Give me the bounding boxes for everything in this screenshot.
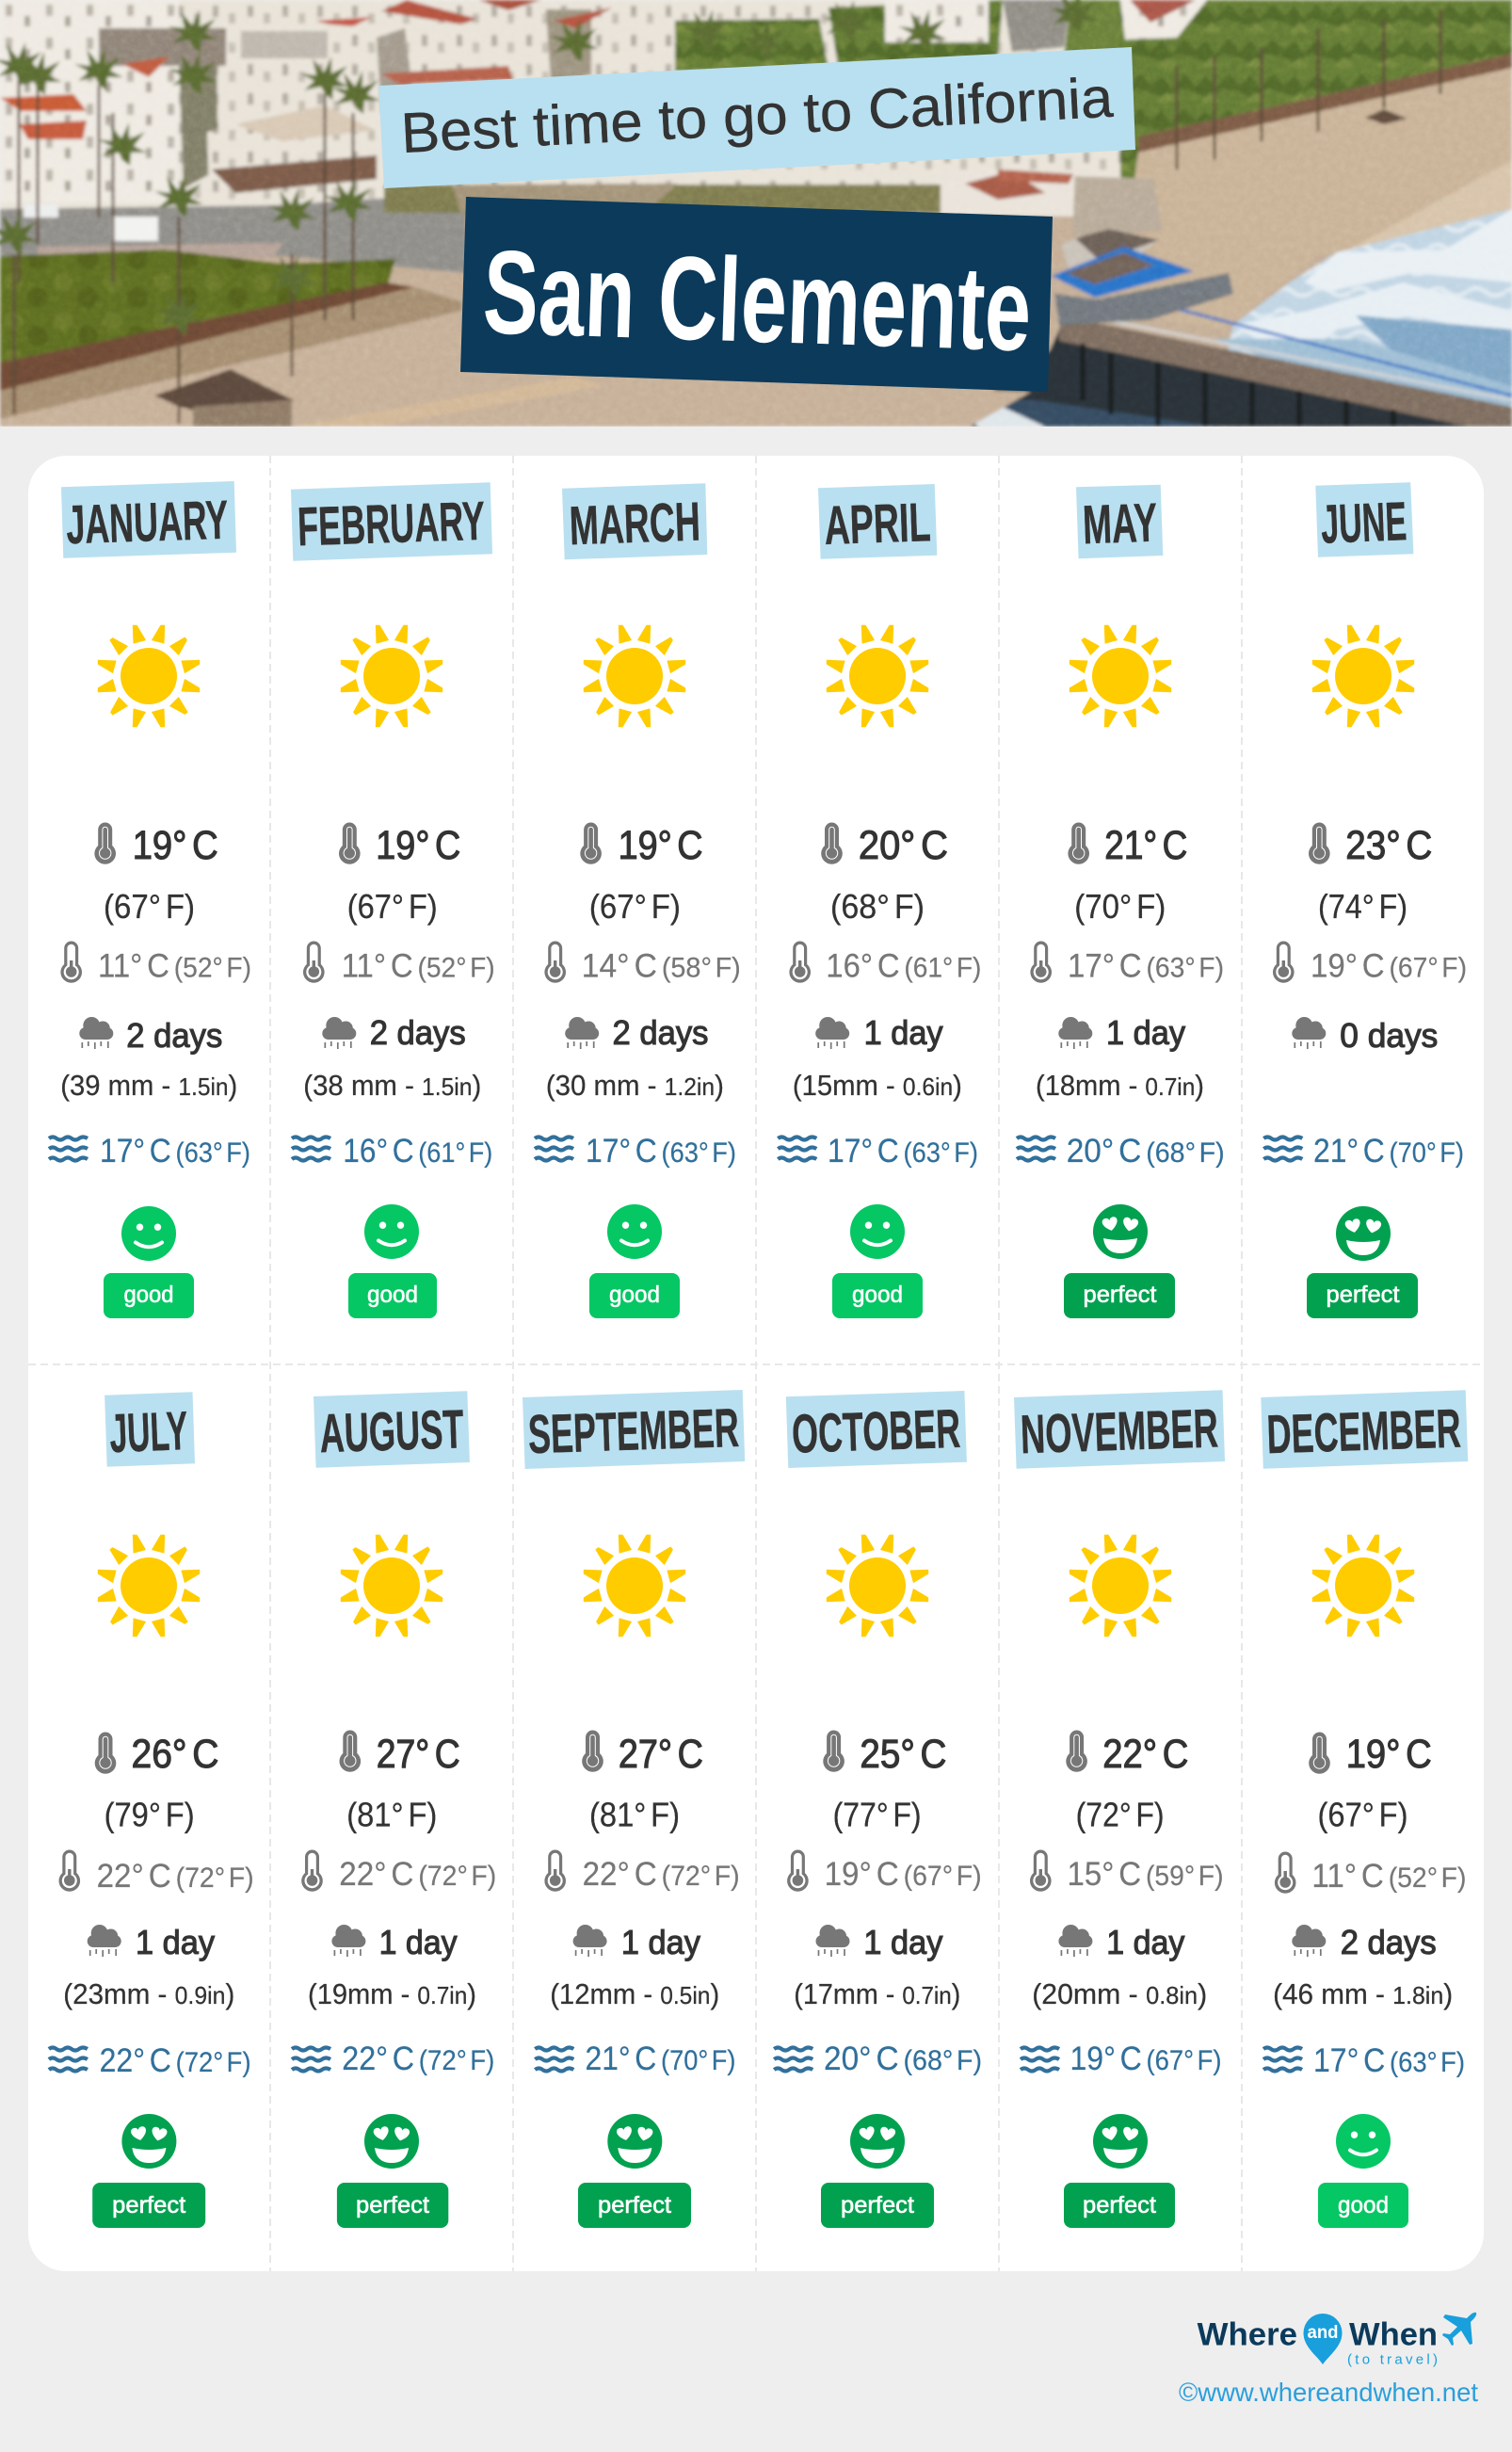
- sea temperature: 21° C (70° F): [586, 2041, 736, 2077]
- icon: smiley: [121, 1206, 176, 1261]
- month: June: [1263, 482, 1467, 1318]
- icon: low temperature thermometer: [58, 1849, 80, 1892]
- high temperature: 21° C: [1104, 823, 1187, 868]
- high temperature fahrenheit: (70° F): [1074, 887, 1166, 926]
- sea temperature: 17° C (63° F): [586, 1133, 736, 1170]
- rainy days: 2 days: [1341, 1923, 1437, 1961]
- between the banners: [384, 185, 949, 213]
- rating badge: good: [1318, 2183, 1408, 2228]
- logo: Where and When: When: [1349, 2317, 1438, 2353]
- high temperature fahrenheit: (81° F): [346, 1795, 437, 1834]
- month label: July: JULY: [108, 1400, 189, 1464]
- month: March: [535, 483, 741, 1318]
- icon: sea waves: [1017, 1137, 1055, 1160]
- icon: low temperature thermometer: [60, 942, 82, 983]
- month label: April: APRIL: [823, 492, 932, 557]
- low temperature: 19° C (67° F): [1311, 947, 1467, 985]
- low temperature: 17° C (63° F): [1068, 947, 1224, 985]
- rainfall: (39 mm - 1.5in): [60, 1069, 237, 1102]
- rating badge: perfect: perfect: [1083, 2192, 1156, 2218]
- icon: sea waves: [1021, 2047, 1059, 2072]
- town base: [0, 0, 1139, 282]
- high temperature: 23° C: [1345, 823, 1432, 868]
- rainy days: 1 day: [136, 1923, 215, 1961]
- icon: rain cloud: [1292, 1925, 1326, 1957]
- icon: high temperature thermometer: [823, 1731, 844, 1772]
- icon: sun: [1070, 625, 1171, 727]
- icon: map pin: and: [1307, 2323, 1339, 2343]
- month label: February: FEBRUARY: [297, 491, 486, 557]
- month: December: [1261, 1390, 1468, 2228]
- icon: sun: [827, 1535, 928, 1637]
- rating badge: good: good: [367, 1282, 418, 1308]
- icon: rain cloud: [322, 1017, 356, 1049]
- rainy days: 2 days: [612, 1013, 708, 1052]
- month label: September: SEPTEMBER: [527, 1397, 740, 1465]
- high temperature fahrenheit: (72° F): [1076, 1795, 1165, 1834]
- icon: sea waves: [1263, 2047, 1302, 2072]
- month label: March: MARCH: [569, 491, 701, 557]
- icon: rain cloud: [565, 1017, 599, 1049]
- title banner: San Clemente: [460, 197, 1053, 392]
- low temperature: 11° C (52° F): [98, 947, 251, 985]
- icon: sun: [1312, 625, 1414, 727]
- icon: high temperature thermometer: [1309, 1733, 1330, 1774]
- low temperature: 22° C (72° F): [339, 1856, 496, 1893]
- photo grain: [0, 0, 1512, 427]
- month label: September: [523, 1390, 745, 1469]
- high temperature fahrenheit: (79° F): [105, 1795, 195, 1834]
- rating badge: perfect: [1064, 2183, 1175, 2228]
- icon: sun: [827, 625, 928, 727]
- rainy days: 2 days: [370, 1013, 466, 1052]
- sea temperature: 22° C (72° F): [342, 2041, 494, 2077]
- high temperature: 19° C: [133, 823, 218, 868]
- high temperature: 22° C: [1102, 1732, 1188, 1777]
- sea temperature: 20° C (68° F): [824, 2041, 982, 2077]
- pier: [1059, 320, 1512, 427]
- title banner: Best time to go to California: [378, 47, 1135, 188]
- rainfall: (17mm - 0.7in): [794, 1977, 960, 2010]
- icon: low temperature thermometer: [544, 1849, 566, 1892]
- rainfall: (20mm - 0.8in): [1032, 1977, 1207, 2010]
- icon: sun: [584, 1535, 685, 1637]
- icon: sea waves: [535, 1137, 573, 1160]
- rating badge: perfect: perfect: [1326, 1282, 1400, 1308]
- rating badge: perfect: [92, 2183, 205, 2228]
- rainy days: 2 days: [126, 1016, 222, 1055]
- sea temperature: 19° C (67° F): [1070, 2041, 1222, 2077]
- panel: monthly weather table: [28, 456, 1484, 2271]
- icon: high temperature thermometer: [582, 1731, 603, 1772]
- high temperature fahrenheit: (77° F): [833, 1795, 922, 1834]
- month: October: [774, 1391, 982, 2228]
- rating badge: good: [348, 1273, 437, 1318]
- rating badge: good: good: [852, 1282, 903, 1308]
- icon: rain cloud: [815, 1017, 849, 1049]
- green hillside: [1120, 0, 1512, 198]
- icon: rain cloud: [79, 1017, 113, 1049]
- icon: high temperature thermometer: [339, 1731, 361, 1772]
- month label: August: AUGUST: [318, 1398, 465, 1464]
- high temperature fahrenheit: (67° F): [347, 887, 438, 926]
- rainy days: 1 day: [863, 1923, 942, 1961]
- month: May: [1017, 485, 1225, 1318]
- icon: sea waves: [49, 2047, 88, 2072]
- month: November: [1014, 1390, 1225, 2228]
- icon: sun: [1070, 1535, 1171, 1637]
- icon: sea waves: [292, 2047, 330, 2072]
- title banner: San Clemente: San Clemente: [481, 225, 1033, 376]
- icon: sea waves: [49, 1137, 88, 1160]
- month label: May: MAY: [1082, 492, 1158, 556]
- month label: June: [1315, 482, 1413, 557]
- rating badge: good: [104, 1273, 194, 1318]
- rainfall: (19mm - 0.7in): [308, 1977, 476, 2010]
- month label: January: JANUARY: [65, 490, 229, 556]
- high temperature: 26° C: [132, 1732, 218, 1777]
- low temperature: 19° C (67° F): [825, 1856, 982, 1893]
- icon: low temperature thermometer: [1030, 942, 1052, 983]
- icon: smiley: [1093, 1204, 1148, 1259]
- rating badge: perfect: [1064, 1273, 1175, 1318]
- icon: rain cloud: [1058, 1017, 1092, 1049]
- month label: October: OCTOBER: [791, 1398, 961, 1465]
- rainfall: (15mm - 0.6in): [793, 1069, 962, 1102]
- rating badge: perfect: [821, 2183, 934, 2228]
- high temperature fahrenheit: (74° F): [1318, 887, 1407, 926]
- icon: low temperature thermometer: [301, 1849, 323, 1892]
- logo: Where and When: [1198, 2313, 1476, 2368]
- high temperature: 20° C: [859, 823, 948, 868]
- low temperature: 16° C (61° F): [826, 947, 981, 985]
- rating badge: perfect: perfect: [598, 2192, 671, 2218]
- icon: low temperature thermometer: [1273, 942, 1295, 983]
- left buildings: [0, 0, 179, 202]
- month label: June: JUNE: [1320, 491, 1407, 556]
- sea temperature: 16° C (61° F): [343, 1133, 492, 1170]
- month label: July: [105, 1392, 195, 1467]
- high temperature fahrenheit: (67° F): [104, 887, 195, 926]
- icon: sea waves: [1263, 1137, 1302, 1160]
- rating badge: good: [832, 1273, 923, 1318]
- icon: rain cloud: [331, 1925, 365, 1957]
- icon: rain cloud: [573, 1925, 607, 1957]
- icon: low temperature thermometer: [789, 942, 811, 983]
- low temperature: 22° C (72° F): [97, 1858, 254, 1895]
- rating badge: good: [589, 1273, 680, 1318]
- icon: smiley: [607, 2114, 662, 2169]
- palms: [14, 9, 1440, 424]
- icon: smiley: [850, 1204, 905, 1259]
- high temperature fahrenheit: (68° F): [830, 887, 925, 926]
- shadowed streets between the buildings: [377, 28, 414, 113]
- rating badge: good: good: [124, 1282, 173, 1308]
- rating badge: perfect: perfect: [112, 2192, 185, 2218]
- rainy days: 0 days: [1340, 1016, 1438, 1055]
- icon: low temperature thermometer: [1275, 1851, 1295, 1894]
- high temperature: 27° C: [619, 1732, 703, 1777]
- low temperature: 15° C (59° F): [1068, 1856, 1224, 1893]
- icon: smiley: [1093, 2114, 1148, 2169]
- sand: [1116, 68, 1512, 330]
- sea temperature: 17° C (63° F): [100, 1133, 250, 1170]
- month label: October: [786, 1391, 967, 1468]
- icon: map pin: [1303, 2314, 1343, 2364]
- icon: sea waves: [535, 2047, 573, 2072]
- rating badge: perfect: [337, 2183, 448, 2228]
- low temperature: 11° C (52° F): [1311, 1858, 1466, 1895]
- rating badge: perfect: perfect: [1083, 1282, 1157, 1308]
- sea: [1224, 209, 1512, 427]
- icon: smiley: [364, 2114, 419, 2169]
- road and grass: [0, 193, 466, 273]
- month: January: [49, 481, 251, 1318]
- rainfall: (18mm - 0.7in): [1036, 1069, 1204, 1102]
- sea temperature: 17° C (63° F): [828, 1133, 978, 1170]
- icon: high temperature thermometer: [339, 823, 361, 864]
- rainy days: 1 day: [1106, 1013, 1185, 1052]
- sea temperature: 22° C (72° F): [100, 2042, 251, 2079]
- icon: high temperature thermometer: [1309, 823, 1330, 864]
- rainy days: 1 day: [864, 1013, 943, 1052]
- rating badge: good: good: [609, 1282, 660, 1308]
- low temperature: 22° C (72° F): [583, 1856, 740, 1893]
- icon: sun: [98, 1535, 200, 1637]
- under pier water and foam: [941, 330, 1478, 427]
- rainfall: (12mm - 0.5in): [550, 1977, 719, 2010]
- icon: smiley: [364, 1204, 419, 1259]
- icon: rain cloud: [815, 1925, 849, 1957]
- icon: high temperature thermometer: [821, 823, 843, 864]
- month label: May: [1076, 485, 1163, 558]
- month label: January: [61, 481, 236, 558]
- rating badge: perfect: [578, 2183, 691, 2228]
- rainfall: (23mm - 0.9in): [63, 1977, 234, 2010]
- title banner: Best time to go to California: Best time to go to California: [399, 66, 1115, 165]
- month label: March: [562, 483, 707, 559]
- icon: sea waves: [774, 2047, 812, 2072]
- sea temperature: 21° C (70° F): [1313, 1133, 1464, 1170]
- icon: sea waves: [778, 1137, 816, 1160]
- dark palms and trees at top: [675, 19, 828, 72]
- rating badge: perfect: perfect: [356, 2192, 429, 2218]
- icon: sea waves: [292, 1137, 330, 1160]
- rating badge: perfect: [1307, 1273, 1418, 1318]
- low temperature: 11° C (52° F): [342, 947, 495, 985]
- icon: rain cloud: [1058, 1925, 1092, 1957]
- high temperature: 19° C: [619, 823, 703, 868]
- logo: Where and When: (to travel): [1347, 2352, 1438, 2368]
- pier restaurant: [1061, 229, 1159, 282]
- icon: high temperature thermometer: [1066, 1731, 1087, 1772]
- month label: November: [1014, 1390, 1225, 1469]
- icon: smiley: [850, 2114, 905, 2169]
- month label: February: [291, 482, 492, 561]
- website credit: ©www.whereandwhen.net: [1179, 2378, 1478, 2407]
- month: July: [49, 1392, 254, 2228]
- sea temperature: 20° C (68° F): [1067, 1133, 1225, 1170]
- month: September: [523, 1390, 745, 2228]
- icon: rain cloud: [1292, 1017, 1326, 1049]
- rating badge: good: good: [1338, 2192, 1389, 2218]
- rainy days: 1 day: [1106, 1923, 1184, 1961]
- icon: low temperature thermometer: [303, 942, 325, 983]
- month label: November: NOVEMBER: [1020, 1397, 1219, 1465]
- icon: sun: [1312, 1535, 1414, 1637]
- rainfall: (46 mm - 1.8in): [1273, 1977, 1453, 2010]
- rating badge: perfect: perfect: [841, 2192, 914, 2218]
- icon: smiley: [1336, 1206, 1391, 1261]
- icon: smiley: [1336, 2114, 1391, 2169]
- beach: [0, 311, 1031, 427]
- icon: rain cloud: [88, 1925, 121, 1957]
- high temperature fahrenheit: (81° F): [589, 1795, 680, 1834]
- logo: Where and When: Where: [1198, 2317, 1297, 2353]
- high temperature fahrenheit: (67° F): [1318, 1795, 1408, 1834]
- icon: sun: [98, 625, 200, 727]
- rainy days: 1 day: [379, 1923, 458, 1961]
- header photo: San Clemente coast and pier: [0, 0, 1512, 427]
- month label: April: [818, 484, 937, 559]
- high temperature: 25° C: [860, 1732, 946, 1777]
- sea temperature: 17° C (63° F): [1313, 2042, 1465, 2079]
- icon: sun: [341, 1535, 442, 1637]
- icon: sun: [584, 625, 685, 727]
- rainy days: 1 day: [621, 1923, 700, 1961]
- high temperature: 19° C: [1346, 1732, 1432, 1777]
- icon: sun: [341, 625, 442, 727]
- icon: high temperature thermometer: [580, 823, 602, 864]
- rainfall: (38 mm - 1.5in): [303, 1069, 481, 1102]
- icon: high temperature thermometer: [94, 823, 116, 864]
- month: April: [778, 484, 981, 1318]
- high temperature: 19° C: [376, 823, 460, 868]
- icon: low temperature thermometer: [544, 942, 566, 983]
- icon: high temperature thermometer: [1068, 823, 1089, 864]
- icon: smiley: [607, 1204, 662, 1259]
- month: August: [292, 1391, 496, 2228]
- month: February: [291, 482, 495, 1318]
- high temperature fahrenheit: (67° F): [589, 887, 681, 926]
- month label: August: [314, 1391, 470, 1468]
- icon: smiley: [121, 2114, 176, 2169]
- icon: low temperature thermometer: [1030, 1849, 1052, 1892]
- low temperature: 14° C (58° F): [582, 947, 741, 985]
- high temperature: 27° C: [377, 1732, 460, 1777]
- icon: low temperature thermometer: [787, 1849, 809, 1892]
- icon: airplane: [1442, 2313, 1476, 2346]
- rainfall: (30 mm - 1.2in): [546, 1069, 724, 1102]
- icon: high temperature thermometer: [95, 1733, 116, 1774]
